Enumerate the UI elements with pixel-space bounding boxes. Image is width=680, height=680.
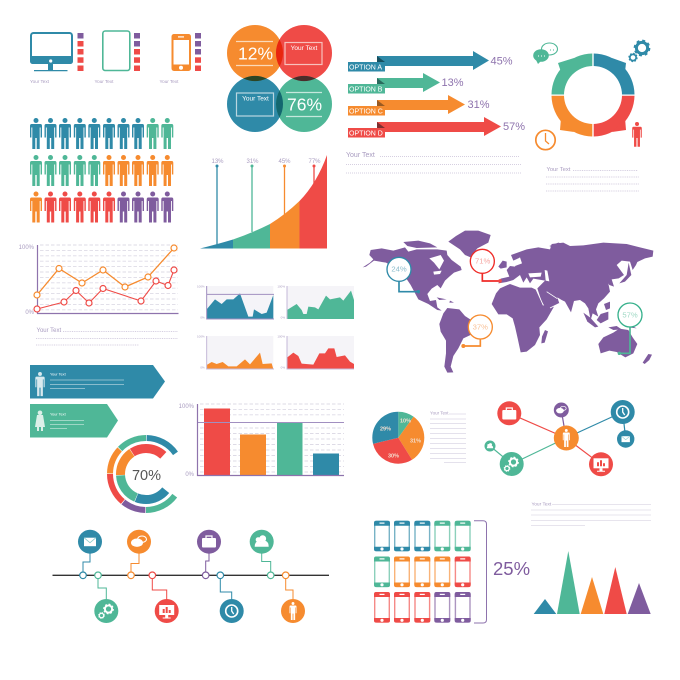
map: seas [536, 289, 559, 308]
arrow: option C [348, 95, 490, 116]
chart: concentric ring 70% [110, 438, 182, 510]
chart: pie: 29% [380, 426, 391, 432]
arrow: option D: 57% [503, 121, 525, 133]
area chart: red [277, 334, 354, 370]
timeline icon: gears [94, 599, 118, 623]
node: mail [617, 430, 634, 448]
arrow: option A: 45% [490, 56, 513, 68]
icon: desktop monitor with squares [30, 33, 84, 71]
caption: tablet: Your Text [94, 79, 114, 84]
chart: pie: 30% [388, 454, 399, 460]
node: gears [500, 452, 524, 476]
node: users [484, 440, 496, 452]
arrow: option A: OPTION A [349, 64, 382, 72]
caption: monitor: Your Text [30, 79, 50, 84]
arrow: option B [348, 73, 464, 94]
arrows: options list [348, 51, 525, 138]
node: screen [589, 452, 613, 476]
bracket with 25%: 25% [493, 558, 530, 579]
ribbon: female note: Your Text [50, 412, 67, 416]
area chart: red: 0% [281, 366, 285, 370]
callout: 37%: 37% [473, 322, 488, 331]
timeline [52, 530, 329, 623]
timeline icon: person [281, 599, 305, 623]
area chart: blue: 0% [200, 316, 205, 320]
text block: arrows note [346, 152, 521, 173]
chart: pie [380, 418, 421, 460]
circle: 76%: 76% [287, 94, 322, 114]
text block: line chart note [36, 328, 178, 345]
area chart: orange [197, 334, 274, 370]
circle: red laptop: Your Text [291, 45, 318, 52]
chart: line chart [19, 245, 178, 316]
arrow: option A [348, 51, 513, 72]
icon: clock [536, 130, 555, 150]
timeline icon: clock [220, 599, 244, 623]
area chart: green: 0% [281, 316, 285, 320]
circle: blue laptop: Your Text [242, 96, 269, 102]
text block: line chart note: Your Text [36, 328, 62, 334]
chart: growth curve with stems: 77% [308, 159, 321, 165]
icon: gears [629, 41, 649, 62]
text block: triangles note [531, 502, 651, 526]
node: clock [611, 400, 635, 424]
icon: red person [632, 122, 642, 147]
chart: bar chart: 0% [185, 472, 195, 478]
area chart: blue: 100% [197, 284, 205, 288]
pictogram: phones grid [374, 521, 471, 623]
chart: segmented donut [552, 54, 634, 136]
icon: phone with squares [172, 33, 201, 71]
ribbon: female note [30, 404, 118, 438]
chart: growth curve with stems: 31% [246, 159, 259, 165]
arrow: option D: OPTION D [349, 130, 383, 138]
node: person [554, 426, 579, 450]
callout: 24% [387, 257, 420, 293]
callout: 57% [618, 303, 642, 355]
ribbon: male note [30, 365, 165, 398]
arrow: option C: 31% [468, 99, 490, 111]
node: chat [554, 402, 569, 418]
area chart: orange: 100% [197, 334, 205, 338]
icon: speech bubbles [533, 43, 558, 64]
chart: pie: 10% [400, 418, 411, 424]
text block: triangles note: Your Text [532, 502, 552, 508]
text block: pie note: Your Text [430, 410, 449, 416]
callout: 24%: 24% [391, 265, 407, 274]
caption: phone: Your Text [160, 79, 179, 84]
chart: growth curve with stems: 45% [278, 159, 291, 165]
callout: 71%: 71% [475, 257, 491, 266]
timeline icon: chat [127, 530, 151, 554]
timeline icon: briefcase [197, 530, 221, 554]
icon: tablet with squares [103, 31, 140, 71]
callout: 71% [470, 249, 502, 283]
map: inland white shapes [429, 255, 549, 281]
area chart: green [277, 284, 354, 320]
chart: growth curve with stems [200, 155, 327, 248]
area chart: green: 100% [277, 284, 285, 288]
map: world with callouts [363, 231, 653, 373]
charts: small area charts [197, 284, 354, 370]
arrow: option B: OPTION B [349, 86, 383, 94]
text block: pie note [430, 410, 466, 462]
area chart: red: 100% [277, 334, 285, 338]
pictogram: people rows [30, 118, 173, 222]
node: briefcase [497, 401, 521, 425]
area chart: blue [197, 284, 274, 320]
chart: triangles [534, 551, 651, 614]
chart: growth curve with stems: 13% [211, 159, 224, 165]
text block: arrows note: Your Text [346, 152, 375, 159]
diagram: network hub [484, 400, 635, 476]
area chart: orange: 0% [200, 366, 205, 370]
bracket with 25% [474, 521, 530, 623]
chart: bar chart: 100% [179, 404, 195, 410]
ribbon: male note: Your Text [50, 372, 67, 376]
callout: 37% [461, 315, 492, 348]
timeline icon: mail [78, 530, 102, 554]
arrow: option B: 13% [442, 77, 464, 89]
arrow: option C: OPTION C [349, 108, 383, 116]
text block: donut note [546, 167, 639, 191]
chart: bar chart [179, 404, 344, 478]
chart: pie: 31% [410, 438, 421, 444]
circle: 12%: 12% [238, 44, 273, 64]
callout: 57%: 57% [622, 310, 638, 319]
map: continents [363, 231, 653, 373]
panel: four overlapping circles [227, 25, 332, 132]
text block: donut note: Your Text [546, 167, 571, 173]
timeline icon: screen [155, 599, 179, 623]
arrow: option D [348, 117, 525, 138]
timeline icon: users [250, 530, 274, 554]
chart: line chart: 100% [19, 245, 35, 251]
chart: concentric ring 70%: 70% [132, 468, 161, 484]
chart: line chart: 0% [25, 310, 35, 316]
